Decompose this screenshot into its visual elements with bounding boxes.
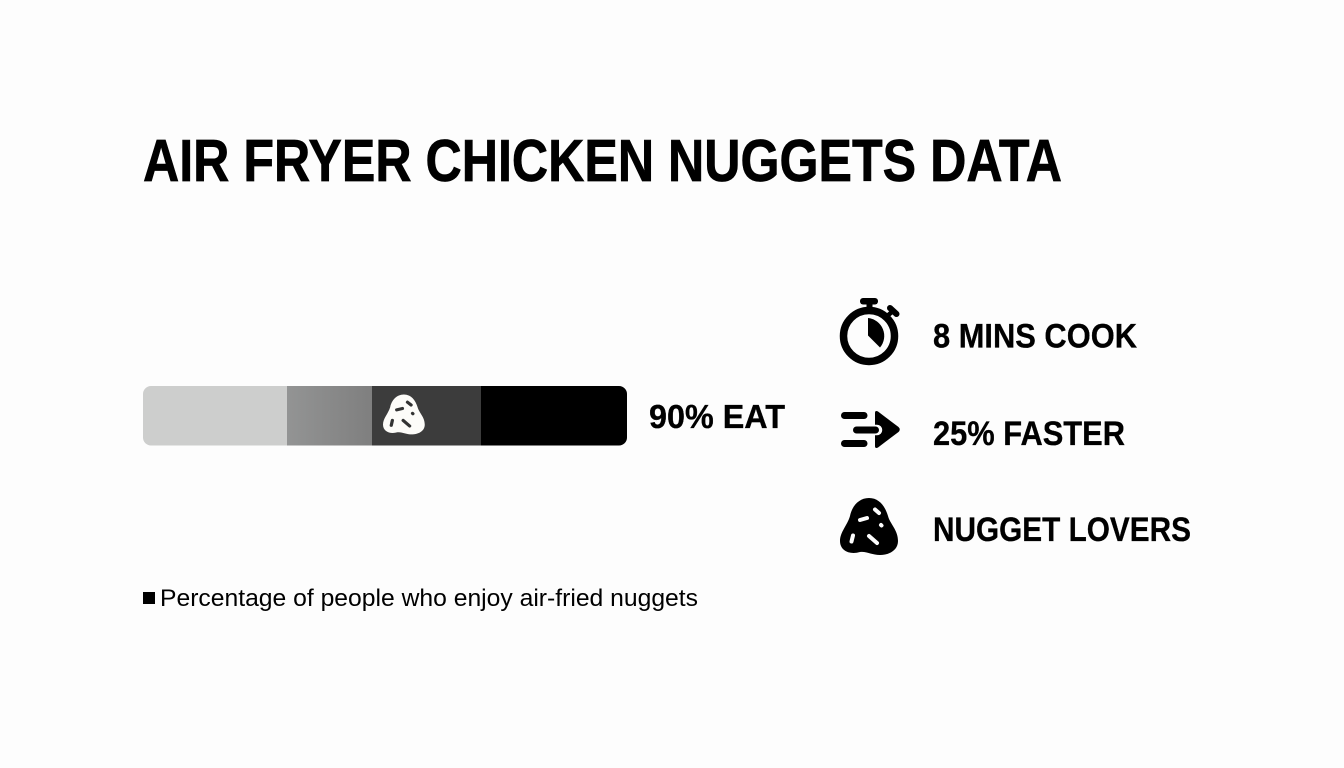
- title: AIR FRYER CHICKEN NUGGETS DATA: [143, 128, 1062, 194]
- stat: cook time: 8 MINS COOK: [933, 318, 1137, 356]
- panel: progress bar: [143, 386, 627, 446]
- icon: speed arrow: [844, 411, 900, 448]
- legend text: Percentage of people who enjoy air-fried nuggets: [160, 585, 698, 612]
- stat: speed: 25% FASTER: [933, 415, 1125, 453]
- bar segments: [143, 386, 627, 446]
- legend swatch: [143, 592, 155, 604]
- stat: nugget lovers: NUGGET LOVERS: [933, 511, 1191, 549]
- icon: black nugget: [840, 498, 898, 555]
- legend caption: [143, 585, 698, 612]
- icon: white nugget on bar: [383, 394, 425, 434]
- bar value label: 90% EAT: [649, 398, 785, 435]
- icon: stopwatch: [844, 298, 896, 362]
- infographic canvas: [143, 139, 1190, 611]
